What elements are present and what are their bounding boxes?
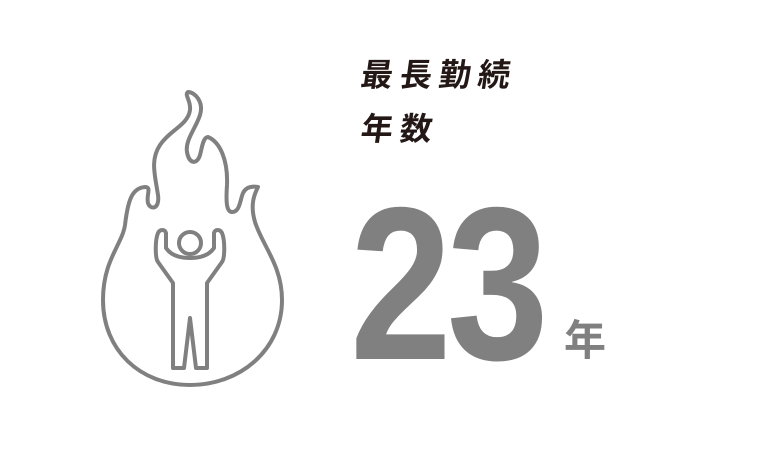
flame outline — [103, 92, 282, 385]
heading line 1: 最長勤続 — [359, 57, 520, 93]
heading line 2: 年数 — [359, 111, 442, 147]
number 23: 23 — [350, 163, 544, 406]
unit 年: 年 — [564, 317, 606, 364]
person outline — [156, 230, 224, 368]
person head — [179, 232, 201, 254]
